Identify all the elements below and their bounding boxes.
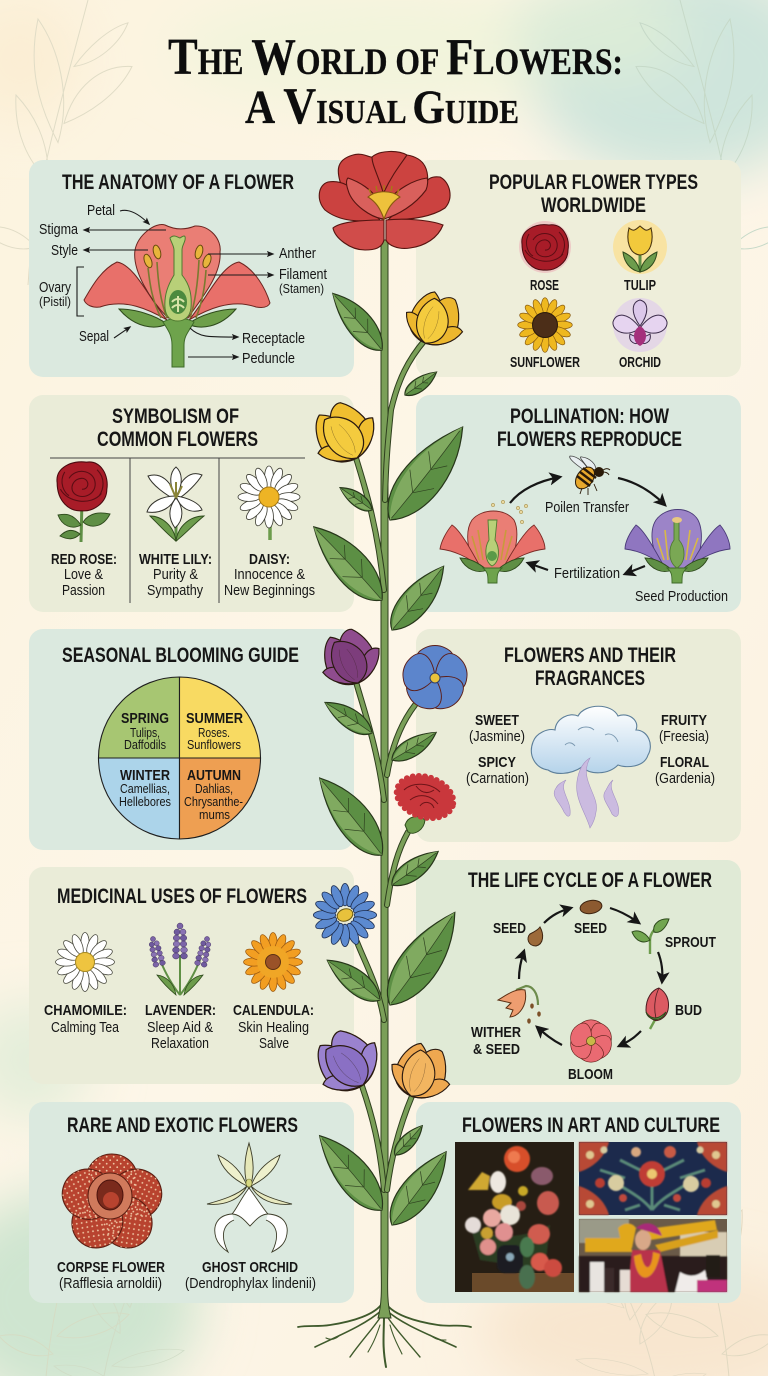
panel: seasonal blooming guide [29, 629, 354, 850]
lavender: Relaxation [151, 1036, 209, 1052]
orchid icon [613, 298, 667, 371]
labels and leader lines: (Stamen) [279, 281, 324, 296]
stage: seed 1: SEED [574, 920, 607, 937]
summer text: SUMMER [186, 710, 243, 727]
panel background [416, 860, 741, 1085]
central plant [298, 151, 479, 1367]
process labels [545, 500, 728, 605]
stage: bloom [566, 1020, 616, 1083]
panel: life cycle [416, 860, 741, 1085]
panel background [416, 629, 741, 842]
labels and leader lines: Peduncle [242, 351, 295, 367]
panel background [416, 1102, 741, 1303]
corpse flower: (Rafflesia arnoldii) [59, 1276, 162, 1292]
icon: scent cloud [531, 706, 650, 828]
chamomile: Calming Tea [51, 1020, 120, 1036]
autumn text: mums [199, 807, 230, 822]
table rules [50, 458, 305, 603]
panel: symbolism of common flowers [29, 395, 354, 612]
ghost orchid: GHOST ORCHID [202, 1259, 298, 1276]
panel: art and culture [416, 1102, 741, 1303]
painting: still life bouquet [455, 1142, 574, 1292]
stage: wither and seed [471, 986, 541, 1058]
title line 2: A VISUAL GUIDE [245, 78, 519, 135]
scent: floral: (Gardenia) [655, 771, 715, 787]
panel: anatomy of a flower [29, 160, 354, 377]
flower cross-section diagram [84, 225, 270, 367]
panel: popular flower types [416, 160, 741, 377]
main stem [378, 240, 391, 1318]
labels and leader lines: (Pistil) [39, 294, 71, 309]
pollen dots [491, 500, 528, 524]
summer text: Sunflowers [187, 737, 241, 752]
scent: floral: FLORAL [660, 754, 709, 771]
orchid icon: ORCHID [619, 354, 661, 371]
stage: wither and seed: WITHER [471, 1024, 521, 1041]
winter text [119, 767, 171, 809]
heading: RARE AND EXOTIC FLOWERS [67, 1114, 298, 1137]
labels and leader lines: Stigma [39, 222, 79, 238]
heading: MEDICINAL USES OF FLOWERS [57, 885, 307, 908]
rose icon: ROSE [530, 277, 559, 294]
ghost orchid: (Dendrophylax lindenii) [185, 1276, 316, 1292]
scent: spicy: (Carnation) [466, 771, 529, 787]
side stems [356, 340, 425, 1190]
scent: sweet: (Jasmine) [469, 729, 525, 745]
heading: SEASONAL BLOOMING GUIDE [62, 644, 299, 667]
column: white lily: WHITE LILY: [139, 551, 212, 568]
icon: violet tulip [303, 1018, 391, 1104]
column: red rose: Love & [64, 567, 103, 583]
tulip icon: TULIP [624, 277, 656, 294]
stage: sprout [632, 919, 716, 954]
winter text: Hellebores [119, 794, 171, 809]
title line 1: THE WORLD OF FLOWERS: [168, 29, 623, 86]
icon: yellow tulip left [301, 392, 386, 474]
panel: medicinal uses [29, 867, 354, 1084]
sunflower icon: SUNFLOWER [510, 354, 580, 371]
icon: purple tulip [312, 622, 388, 693]
heading line 2: FRAGRANCES [535, 667, 645, 690]
heading: FLOWERS AND THEIR [504, 644, 676, 667]
icon: blue five-petal flower [398, 645, 472, 716]
seasonal pie chart [98, 677, 260, 839]
autumn text: Dahlias, [195, 781, 233, 796]
labels and leader lines: Style [51, 243, 78, 259]
panel: fragrances [416, 629, 741, 842]
summer text [186, 710, 243, 752]
column: daisy: New Beginnings [224, 583, 315, 599]
panel background [416, 395, 741, 612]
photo: flower festival [579, 1219, 727, 1292]
panel background [29, 867, 354, 1084]
column: red rose: Passion [62, 583, 105, 599]
chamomile [44, 933, 127, 1036]
icon: large red flower [319, 151, 450, 250]
column: white lily: Sympathy [147, 583, 204, 599]
process labels: Seed Production [635, 589, 728, 605]
panel background [29, 395, 354, 612]
labels and leader lines: Sepal [79, 329, 109, 345]
stage: bud: BUD [675, 1002, 702, 1019]
spring text: Tulips, [130, 725, 160, 740]
calendula: Skin Healing [238, 1020, 309, 1036]
spring text [121, 710, 169, 752]
lavender: Sleep Aid & [147, 1020, 213, 1036]
panel background [29, 160, 354, 377]
scent: fruity: FRUITY [661, 712, 707, 729]
stage: seed 1 [574, 899, 607, 937]
ghost orchid [185, 1143, 316, 1292]
title [168, 29, 623, 135]
autumn text: AUTUMN [187, 767, 241, 784]
stage: bloom: BLOOM [568, 1066, 613, 1083]
labels and leader lines: Filament [279, 267, 327, 283]
column: red rose: RED ROSE: [51, 551, 117, 568]
heading: POLLINATION: HOW [510, 405, 669, 428]
panel: pollination [416, 395, 741, 612]
winter text: WINTER [120, 767, 170, 784]
labels and leader lines: Ovary [39, 280, 72, 296]
cycle arrows [519, 908, 662, 1046]
stage: bud [646, 988, 702, 1029]
panel background [416, 160, 741, 377]
scent: spicy: SPICY [478, 754, 516, 771]
icon: orange tulip [384, 1036, 460, 1108]
lavender [145, 923, 216, 1052]
spring text: Daffodils [124, 737, 166, 752]
calendula: CALENDULA: [233, 1002, 314, 1019]
labels and leader lines: Petal [87, 203, 115, 219]
source flower [440, 511, 545, 583]
panel background [29, 629, 354, 850]
lavender: LAVENDER: [145, 1002, 216, 1019]
column: white lily [139, 467, 212, 599]
calendula [233, 933, 314, 1052]
heading: SYMBOLISM OF [112, 405, 239, 428]
scent: sweet [469, 712, 525, 745]
labels and leader lines: Receptacle [242, 331, 305, 347]
scent: sweet: SWEET [475, 712, 519, 729]
calendula: Salve [259, 1036, 289, 1052]
receiving flower [625, 510, 730, 583]
heading: POPULAR FLOWER TYPES [489, 171, 698, 194]
heading line 2: FLOWERS REPRODUCE [497, 428, 682, 451]
icon: yellow tulip right [399, 284, 473, 354]
panel: rare and exotic flowers [29, 1102, 354, 1303]
autumn text: Chrysanthe- [184, 794, 243, 809]
cycle arrows [510, 477, 665, 574]
stage: seed 2 [493, 920, 543, 946]
rose icon [519, 221, 571, 294]
process labels: Poilen Transfer [545, 500, 629, 516]
column: daisy: Innocence & [234, 567, 305, 583]
heading line 2: COMMON FLOWERS [97, 428, 258, 451]
column: daisy [224, 466, 315, 599]
corpse flower: CORPSE FLOWER [57, 1259, 165, 1276]
winter text: Camellias, [120, 781, 170, 796]
autumn text [184, 767, 243, 822]
labels and leader lines [39, 203, 327, 367]
spring text: SPRING [121, 710, 169, 727]
icon: red carnation [391, 769, 459, 833]
scent: fruity: (Freesia) [659, 729, 709, 745]
process labels: Fertilization [554, 566, 620, 582]
textile: floral carpet [579, 1142, 727, 1215]
column: red rose [51, 462, 117, 599]
labels and leader lines: Anther [279, 246, 316, 262]
heading: THE ANATOMY OF A FLOWER [62, 171, 294, 194]
leaves [301, 285, 479, 1234]
icon: bee [570, 456, 610, 495]
scent: fruity [659, 712, 709, 745]
roots [298, 1300, 471, 1367]
scent: spicy [466, 754, 529, 787]
stage: wither and seed: & SEED [473, 1041, 520, 1058]
corpse flower [56, 1154, 168, 1292]
heading line 2: WORLDWIDE [541, 194, 646, 217]
column: daisy: DAISY: [249, 551, 290, 568]
tulip icon [613, 220, 667, 294]
column: white lily: Purity & [153, 567, 198, 583]
stage: seed 2: SEED [493, 920, 526, 937]
sunflower icon [510, 298, 580, 371]
panel background [29, 1102, 354, 1303]
scent: floral [655, 754, 715, 787]
chamomile: CHAMOMILE: [44, 1002, 127, 1019]
stage: sprout: SPROUT [665, 934, 716, 951]
icon: blue daisy [313, 883, 377, 947]
summer text: Roses. [198, 725, 230, 740]
